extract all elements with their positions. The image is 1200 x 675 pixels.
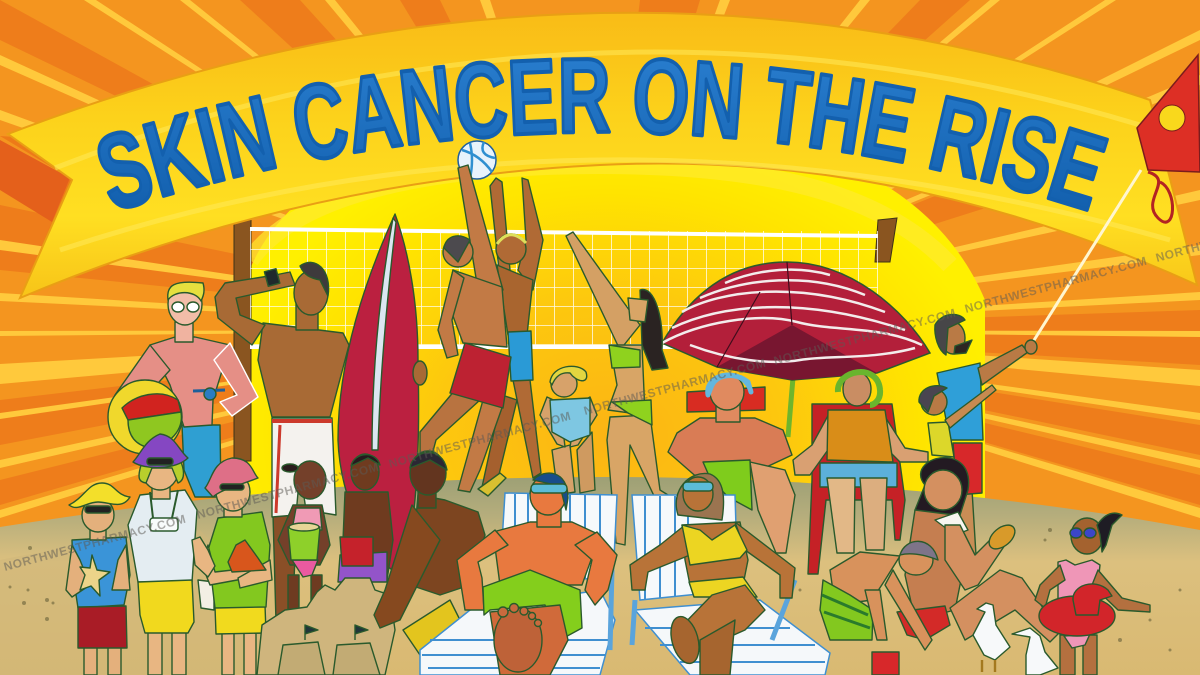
- figure: volleyball player in red shorts: [420, 165, 511, 492]
- figure: man on red chair with green shorts: [668, 374, 795, 553]
- figure: child in pink hat with green shirt: [192, 458, 272, 675]
- figure: woman in green bikini: [566, 232, 668, 545]
- figure: child pointing at kite: [919, 385, 996, 457]
- figure: girl with red duck float: [1035, 513, 1150, 675]
- surfboard: [338, 214, 419, 575]
- watermark: site name repeated: [2, 203, 1200, 574]
- figure: woman in orange top on red chair: [793, 372, 928, 574]
- sand beach: [0, 477, 1200, 675]
- watermark: site name repeated: NORTHWESTPHARMACY.COM: [772, 306, 958, 368]
- figure: blonde woman crouching: [540, 366, 597, 495]
- figure: volleyball player in blue shorts: [478, 178, 543, 496]
- kite and string: [1031, 55, 1200, 345]
- watermark: site name repeated: NORTHWESTPHARMACY.COM: [582, 356, 768, 418]
- banner title: SKIN CANCER ON THE RISE: [97, 57, 1109, 212]
- lounge chair and sunbathing woman: [630, 473, 830, 675]
- figure: boy with red bucket: [338, 454, 393, 582]
- figure: woman in purple hat with camera: [128, 434, 214, 675]
- watermark: site name repeated: NORTHWESTPHARMACY.COM: [2, 512, 188, 574]
- watermark: site name repeated: NORTHWESTPHARMACY.COM: [387, 409, 573, 471]
- figure: boy in green striped shorts with bucket: [820, 541, 938, 675]
- figure: boy in yellow hat with starfish: [66, 483, 130, 675]
- sandcastle: [257, 578, 395, 675]
- figure: man flying kite: [935, 315, 1037, 555]
- figure: tall man saluting: [215, 262, 427, 622]
- volleyball net and posts: [234, 216, 897, 461]
- figure: seagulls: [973, 603, 1058, 675]
- lounge chair and sunbathing man: [420, 473, 617, 675]
- figure: small girl with green bucket: [278, 461, 330, 610]
- figure: man sitting by the sandcastle: [374, 451, 485, 655]
- watermark: site name repeated: NORTHWESTPHARMACY.COM: [963, 254, 1149, 316]
- figure: sunburned man with beach ball: [108, 282, 258, 497]
- umbrella: [662, 262, 930, 437]
- banner: [0, 12, 1198, 300]
- volleyball: [458, 141, 496, 179]
- figure: woman with sunscreen: [897, 458, 1060, 642]
- yellow sun disc: [240, 120, 985, 520]
- watermark: site name repeated: NORTHWESTPHARMACY.COM: [195, 460, 381, 522]
